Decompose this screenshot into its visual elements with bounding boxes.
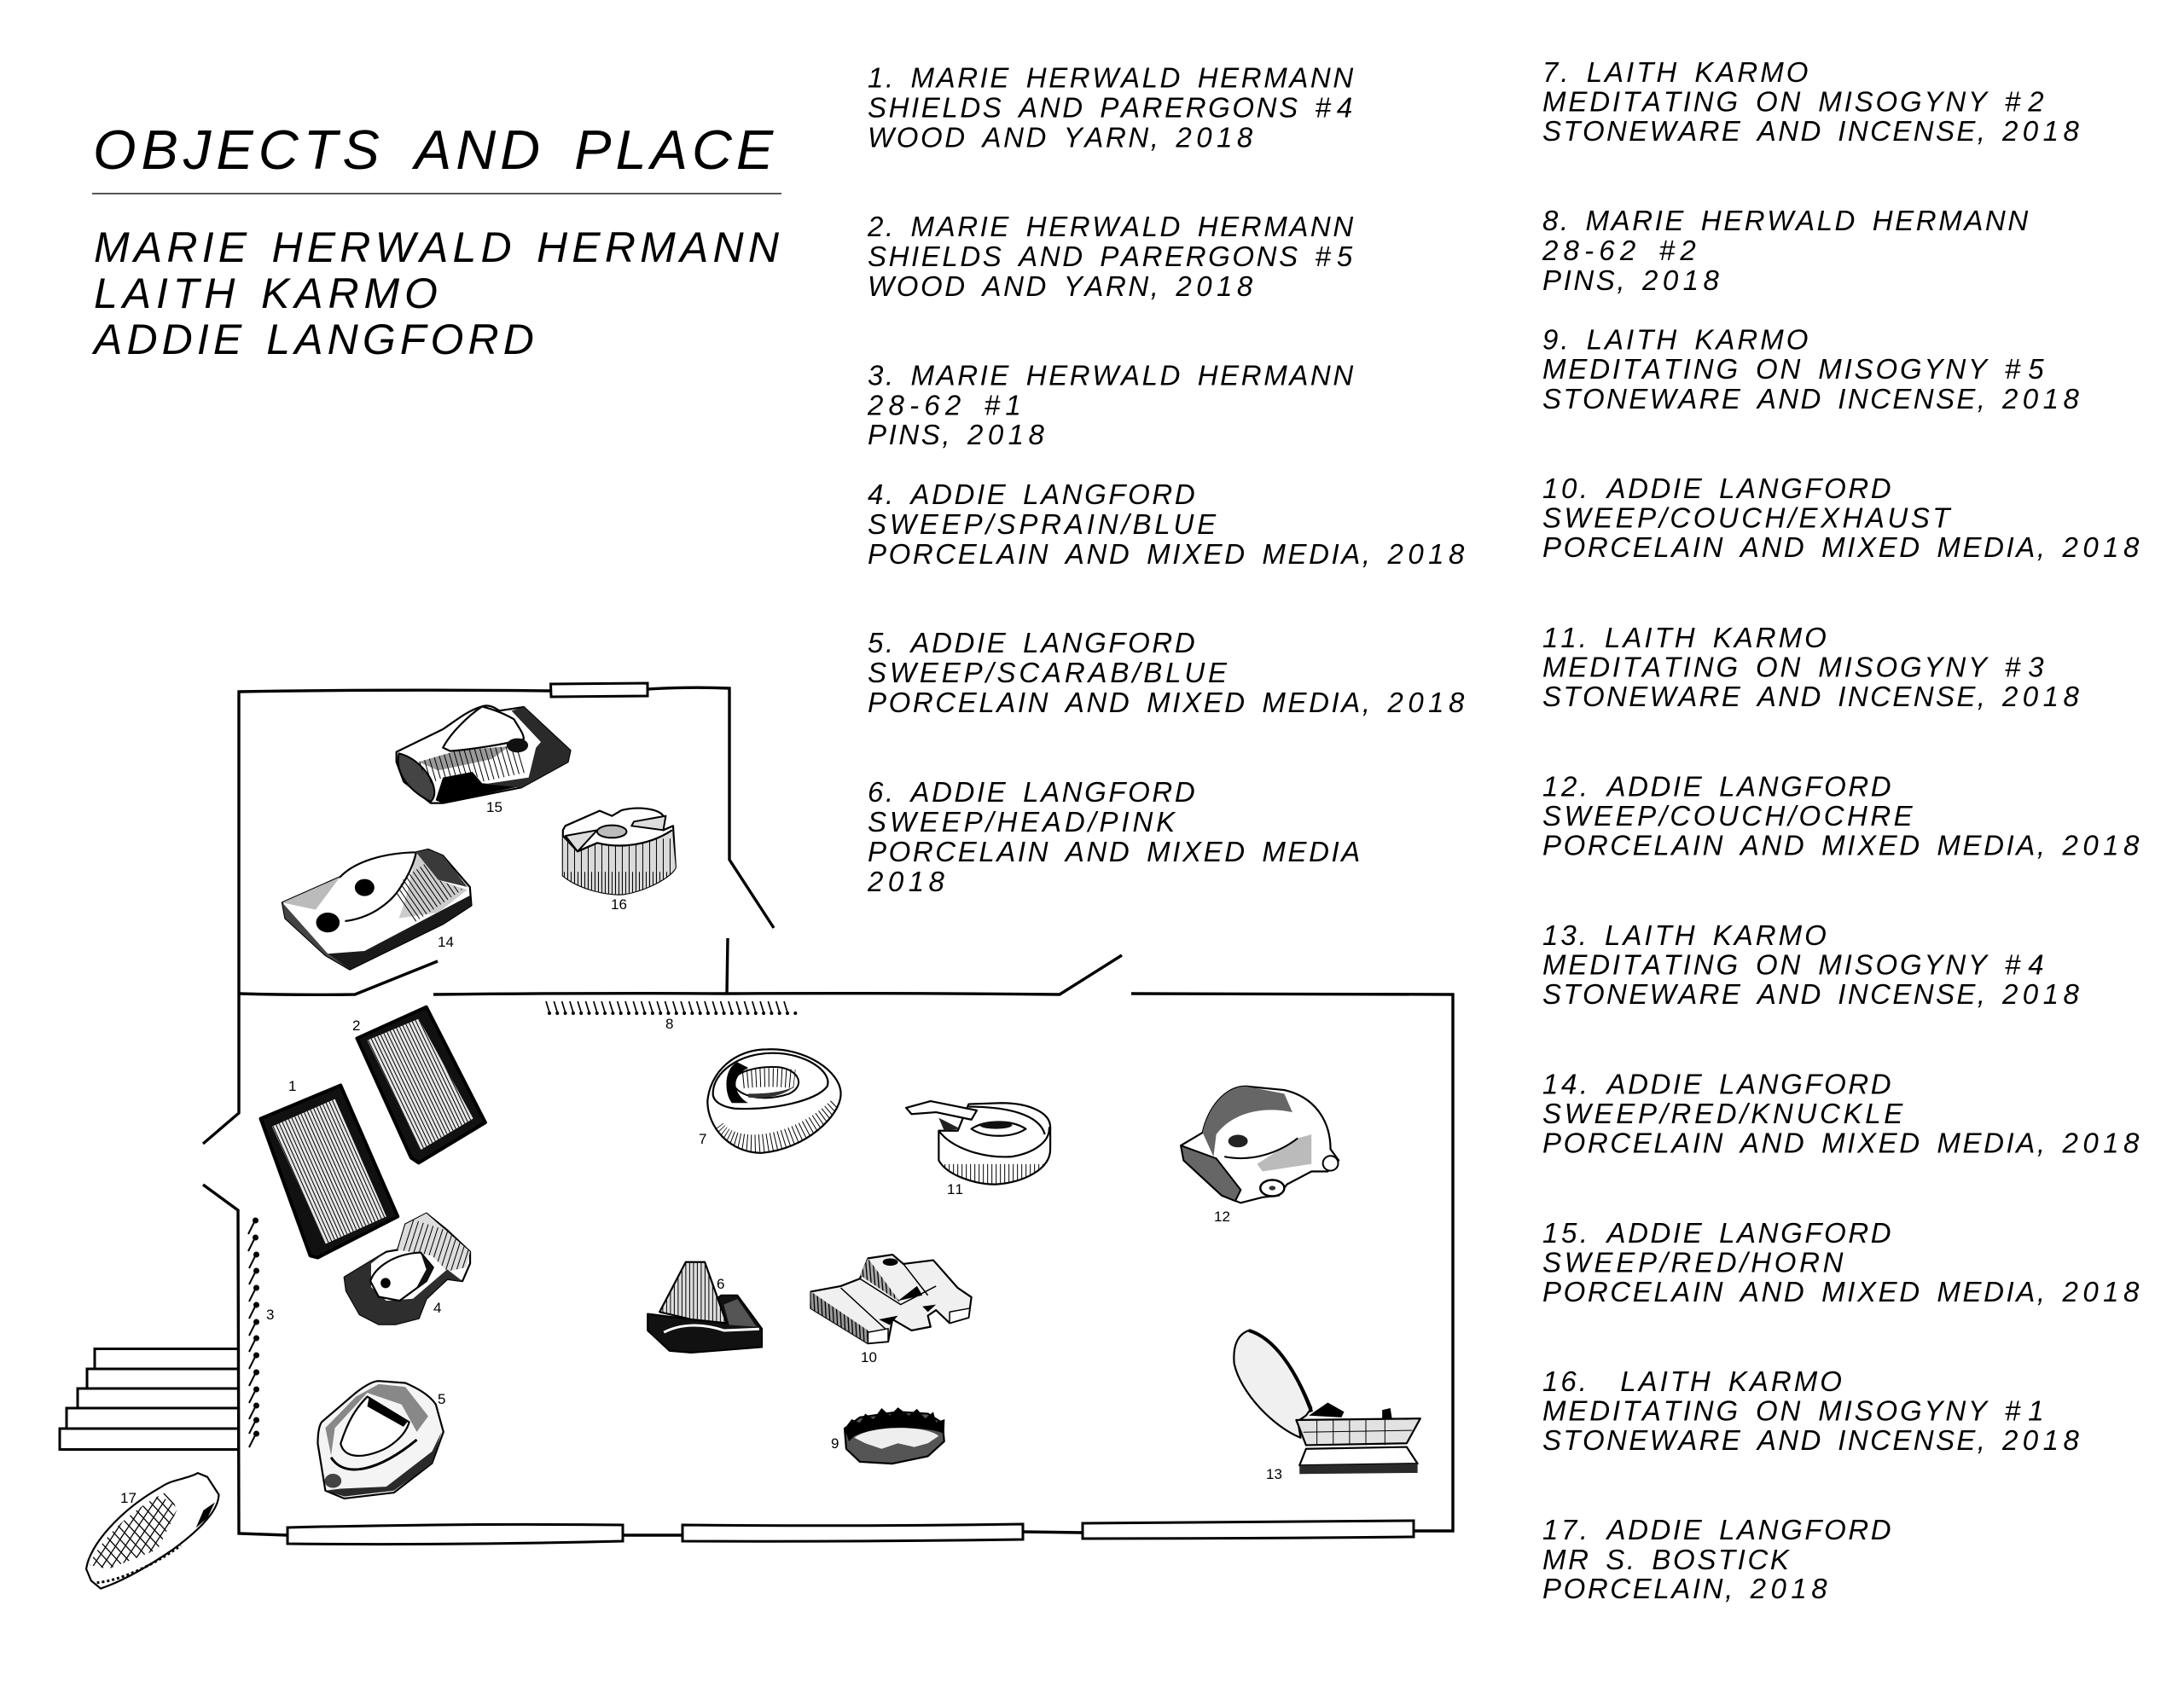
object 10: 10 <box>861 1349 877 1365</box>
list item 11: STONEWARE AND INCENSE, 2018 <box>1542 681 2083 712</box>
object 11 <box>906 1101 1053 1197</box>
list item 6: SWEEP/HEAD/PINK <box>868 806 1178 838</box>
object 2: shield frame <box>352 1007 485 1162</box>
list item 12: 12. ADDIE LANGFORD <box>1542 771 1893 802</box>
object 6 <box>648 1262 762 1353</box>
object 15: 15 <box>486 799 502 815</box>
object 12 <box>1181 1087 1339 1225</box>
list item 1: SHIELDS AND PARERGONS #4 <box>868 92 1358 123</box>
object 16: 16 <box>611 896 627 913</box>
floor plan walls <box>203 683 1453 1545</box>
list item 9: MEDITATING ON MISOGYNY #5 <box>1542 353 2052 385</box>
list item 12: SWEEP/COUCH/OCHRE <box>1542 800 1915 832</box>
stairs <box>60 1349 237 1450</box>
list item 14: SWEEP/RED/KNUCKLE <box>1542 1098 1906 1129</box>
list item 10: PORCELAIN AND MIXED MEDIA, 2018 <box>1542 531 2144 563</box>
list item 5: PORCELAIN AND MIXED MEDIA, 2018 <box>868 687 1469 718</box>
list item 3: 3. MARIE HERWALD HERMANN <box>868 360 1356 391</box>
artist names: ADDIE LANGFORD <box>91 316 538 363</box>
object 7 <box>699 1049 841 1153</box>
object 13: 13 <box>1266 1466 1282 1482</box>
list item 5: 5. ADDIE LANGFORD <box>868 627 1197 658</box>
list item 7: MEDITATING ON MISOGYNY #2 <box>1542 86 2052 118</box>
list item 15: SWEEP/RED/HORN <box>1542 1247 1846 1278</box>
object 2: shield frame: 2 <box>352 1017 360 1034</box>
list item 9: 9. LAITH KARMO <box>1542 324 1810 356</box>
list item 15: PORCELAIN AND MIXED MEDIA, 2018 <box>1542 1276 2144 1307</box>
list item 16: 16. LAITH KARMO <box>1542 1365 1844 1397</box>
object 17 <box>82 1473 218 1589</box>
list item 7: 7. LAITH KARMO <box>1542 56 1810 88</box>
list item 5: SWEEP/SCARAB/BLUE <box>868 657 1230 688</box>
list item 13: 13. LAITH KARMO <box>1542 919 1829 951</box>
list item 14: 14. ADDIE LANGFORD <box>1542 1068 1893 1100</box>
object 15 <box>397 705 570 815</box>
list item 15: 15. ADDIE LANGFORD <box>1542 1217 1893 1249</box>
list item 1: WOOD AND YARN, 2018 <box>868 122 1258 154</box>
object 17: 17 <box>120 1490 136 1506</box>
list item 17: MR S. BOSTICK <box>1542 1544 1792 1575</box>
object 12: 12 <box>1214 1209 1230 1225</box>
object 3: vertical row of pins <box>248 1218 274 1447</box>
object 5 <box>317 1381 445 1499</box>
list item 17: 17. ADDIE LANGFORD <box>1542 1514 1893 1545</box>
object 9: bottle cap bowl: 9 <box>831 1435 839 1452</box>
list item 4: 4. ADDIE LANGFORD <box>868 478 1197 510</box>
object 10 <box>810 1255 972 1365</box>
object 5: 5 <box>438 1391 445 1407</box>
object 4 <box>345 1214 470 1325</box>
list item 10: SWEEP/COUCH/EXHAUST <box>1542 501 1953 534</box>
list item 8: 28-62 #2 <box>1542 235 1701 266</box>
list item 8: PINS, 2018 <box>1542 264 1723 296</box>
list item 2: 2. MARIE HERWALD HERMANN <box>867 211 1356 242</box>
object 1: shield frame <box>261 1078 398 1258</box>
object 3: vertical row of pins: 3 <box>266 1307 274 1323</box>
list item 6: 2018 <box>867 866 949 897</box>
title: OBJECTS AND PLACE <box>93 119 777 181</box>
list item 9: STONEWARE AND INCENSE, 2018 <box>1542 383 2083 415</box>
object 14: 14 <box>438 934 454 950</box>
list item 8: 8. MARIE HERWALD HERMANN <box>1542 205 2030 236</box>
list item 6: 6. ADDIE LANGFORD <box>868 776 1197 808</box>
object 9: bottle cap bowl <box>831 1407 944 1464</box>
list item 4: PORCELAIN AND MIXED MEDIA, 2018 <box>868 538 1469 570</box>
list item 14: PORCELAIN AND MIXED MEDIA, 2018 <box>1542 1128 2144 1158</box>
list item 11: MEDITATING ON MISOGYNY #3 <box>1542 652 2052 682</box>
object 8: horizontal row of pins <box>546 1001 799 1032</box>
artist names: MARIE HERWALD HERMANN <box>94 223 783 271</box>
object 6: 6 <box>717 1276 724 1292</box>
list item 16: MEDITATING ON MISOGYNY #1 <box>1542 1395 2052 1426</box>
object 14 <box>282 849 471 970</box>
list item 6: PORCELAIN AND MIXED MEDIA <box>868 836 1362 867</box>
object 11: 11 <box>947 1181 963 1197</box>
list item 4: SWEEP/SPRAIN/BLUE <box>868 508 1219 540</box>
object 8: horizontal row of pins: 8 <box>665 1016 673 1032</box>
list item 3: 28-62 #1 <box>867 390 1026 421</box>
object 13 <box>1234 1330 1420 1482</box>
list item 17: PORCELAIN, 2018 <box>1542 1573 1832 1604</box>
object 4: 4 <box>433 1300 441 1316</box>
list item 11: 11. LAITH KARMO <box>1542 622 1829 653</box>
list item 10: 10. ADDIE LANGFORD <box>1542 472 1893 504</box>
list item 13: STONEWARE AND INCENSE, 2018 <box>1542 978 2083 1010</box>
list item 3: PINS, 2018 <box>868 419 1048 450</box>
list item 16: STONEWARE AND INCENSE, 2018 <box>1542 1424 2083 1456</box>
list item 13: MEDITATING ON MISOGYNY #4 <box>1542 948 2052 981</box>
object 1: shield frame: 1 <box>288 1078 296 1094</box>
list item 7: STONEWARE AND INCENSE, 2018 <box>1542 115 2083 147</box>
list item 2: SHIELDS AND PARERGONS #5 <box>868 241 1358 272</box>
object 7: 7 <box>699 1131 706 1147</box>
list item 1: 1. MARIE HERWALD HERMANN <box>868 61 1356 93</box>
artist names: LAITH KARMO <box>94 270 443 317</box>
list item 12: PORCELAIN AND MIXED MEDIA, 2018 <box>1542 829 2144 861</box>
object 16 <box>561 809 678 913</box>
list item 2: WOOD AND YARN, 2018 <box>868 270 1258 302</box>
